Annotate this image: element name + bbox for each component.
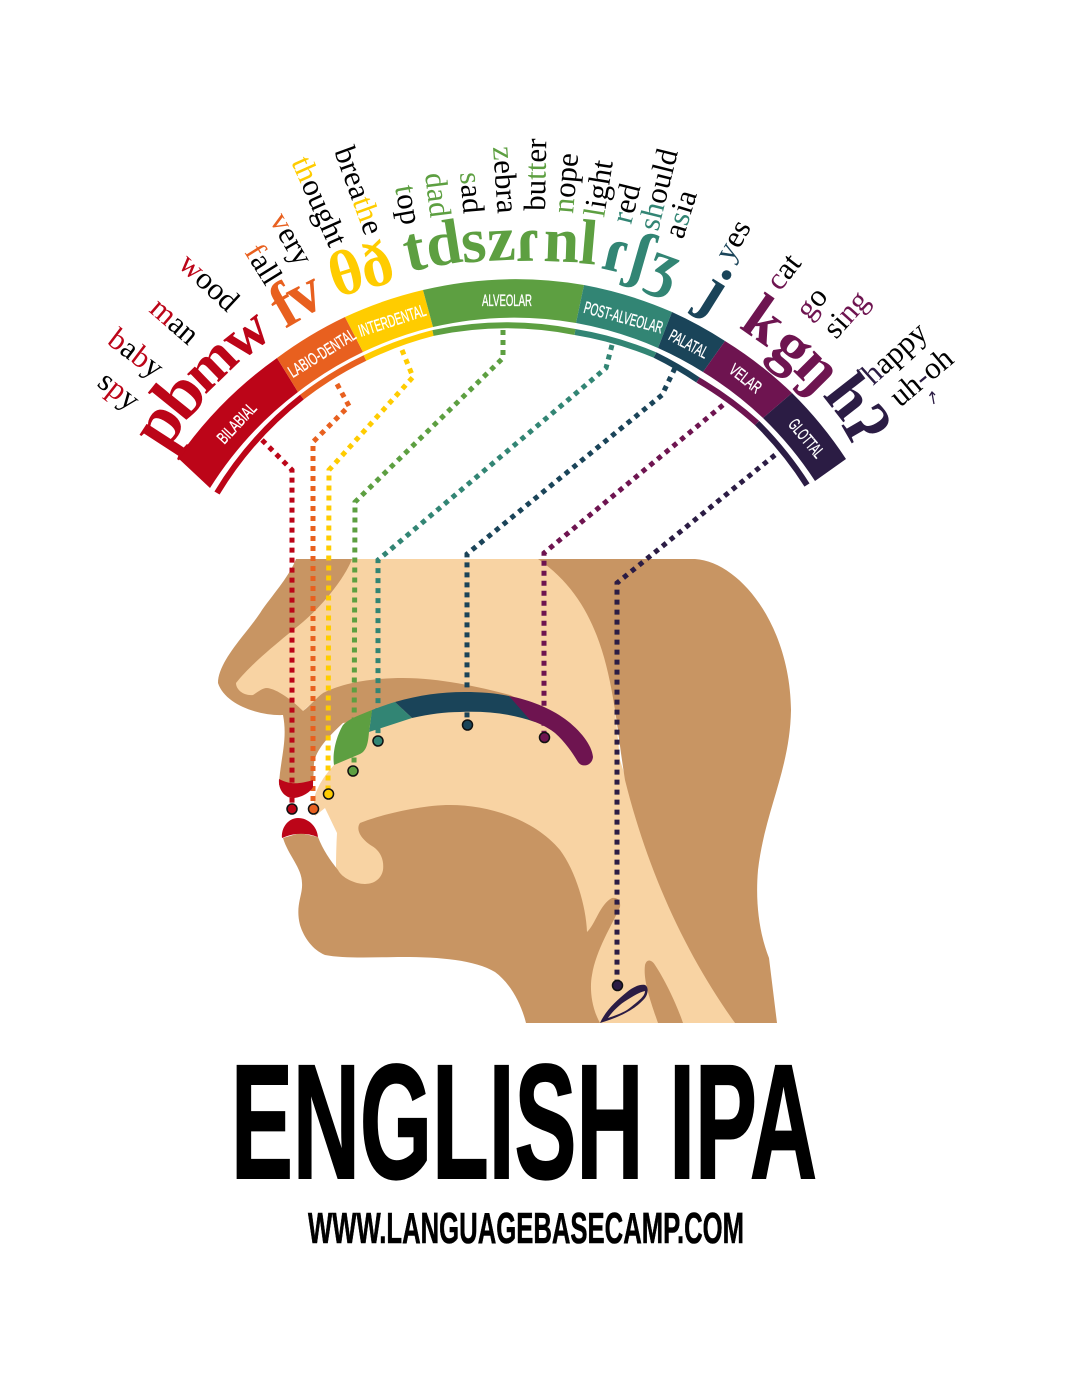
word: wood: wood [172, 246, 247, 318]
marker: velar [540, 732, 550, 742]
symbols: alveolar: z [485, 203, 517, 275]
band: velar [703, 341, 792, 418]
label: velar: VELAR [725, 360, 765, 397]
marker: glottal [612, 980, 622, 990]
symbols: bilabial [115, 293, 283, 462]
symbols: alveolar: s [457, 204, 489, 277]
symbols: palatal: j [687, 253, 743, 325]
word: nope: nope [545, 152, 585, 215]
symbols: labio-dental: v [273, 254, 334, 331]
symbols: glottal: h [811, 360, 889, 432]
dotted connector: glottal [617, 455, 775, 986]
icon: glottal stop arrow [930, 392, 935, 404]
symbols: labio-dental [256, 254, 334, 341]
symbols: post-alveolar [597, 212, 692, 302]
place of articulation arc [178, 279, 846, 493]
label: labio-dental: LABIO-DENTAL [285, 325, 359, 382]
thin strip: glottal [757, 423, 807, 485]
word: breathe: breathe [327, 141, 392, 239]
palate: post-alveolar zone [369, 702, 412, 732]
band: post-alveolar [576, 285, 672, 348]
symbols: alveolar: ɾ [515, 204, 542, 275]
back of head and neck [538, 559, 791, 1023]
thin strip: palatal [655, 355, 698, 380]
thin strip: velar [698, 380, 757, 423]
thin strip: interdental [365, 333, 433, 358]
band: alveolar [423, 279, 584, 327]
symbols: alveolar: l [577, 206, 601, 278]
word: cat: cat [758, 246, 808, 296]
word: fall: fall [238, 237, 290, 291]
palate: velum [509, 696, 593, 765]
symbols: alveolar: n [543, 204, 581, 276]
word: light: light [576, 157, 620, 219]
label: post-alveolar: POST-ALVEOLAR [582, 298, 665, 337]
vocal tract articulators [279, 692, 648, 1023]
example words [92, 138, 960, 417]
word: very: very [263, 206, 321, 272]
palate: palatal zone [395, 692, 535, 722]
word: butter: butter [517, 138, 553, 211]
head profile illustration [218, 559, 791, 1023]
word: asia: asia [656, 185, 704, 242]
epiglottis [645, 960, 683, 1023]
upper lip [279, 779, 313, 798]
label: bilabial: BILABIAL [213, 399, 261, 448]
dotted connector: velar [544, 405, 723, 737]
marker: alveolar [348, 766, 358, 776]
band: interdental [345, 290, 433, 352]
marker: labio-dental [308, 804, 318, 814]
symbols: velar: k [730, 280, 800, 359]
symbols: alveolar [396, 203, 601, 286]
thin strip: alveolar [433, 325, 575, 333]
word: yes: yes [707, 213, 758, 266]
IPA symbols [115, 203, 904, 462]
dotted connector: interdental [328, 350, 413, 794]
head interior cavity [232, 559, 735, 1023]
dotted connector: bilabial [262, 440, 292, 809]
word: man: man [143, 290, 207, 352]
lower lip [282, 818, 318, 838]
label: interdental: INTERDENTAL [356, 301, 429, 341]
symbols: post-alveolar: ʃ [618, 217, 664, 293]
glottis [600, 985, 648, 1023]
symbols: interdental [319, 226, 400, 311]
marker: bilabial [287, 804, 297, 814]
word: baby: baby [102, 321, 171, 385]
symbols: interdental: ð [352, 226, 400, 303]
symbols: alveolar: d [420, 205, 466, 281]
website url: WWW.LANGUAGEBASECAMP.COM [308, 1204, 744, 1253]
symbols: velar: ŋ [782, 330, 857, 405]
label: alveolar: ALVEOLAR [482, 291, 532, 310]
jaw and tongue [283, 805, 620, 1023]
symbols: labio-dental: f [256, 269, 311, 341]
dotted connector: post-alveolar [378, 345, 612, 741]
symbols: interdental: θ [319, 234, 372, 311]
word: top: top [388, 182, 429, 227]
marker: post-alveolar [373, 736, 383, 746]
dotted connector: alveolar [354, 330, 503, 771]
marker: interdental [324, 789, 334, 799]
symbols: alveolar: t [396, 212, 432, 286]
marker: palatal [462, 720, 472, 730]
symbols: post-alveolar: ʒ [640, 225, 692, 302]
palate: alveolar ridge [334, 710, 372, 765]
word: thought: thought [285, 151, 355, 252]
word: go: go [788, 279, 834, 325]
word: happy: happy [854, 314, 934, 391]
symbols: bilabial: m [168, 322, 250, 404]
dotted connector: palatal [467, 368, 675, 725]
word: zebra: zebra [486, 145, 526, 215]
symbols: glottal [811, 360, 904, 455]
word: sad: sad [453, 171, 492, 215]
symbols: post-alveolar: ɾ [597, 212, 638, 287]
band: palatal [658, 312, 725, 372]
word: spy: spy [92, 363, 148, 417]
label: palatal: PALATAL [666, 326, 712, 362]
thin strip: post-alveolar [575, 332, 655, 355]
nose and upper lip [218, 559, 530, 785]
word: uh-oh: uh-oh [882, 340, 960, 413]
thin strip: bilabial [217, 397, 302, 493]
symbols: glottal: ʔ [828, 394, 904, 455]
articulation point markers [287, 720, 622, 990]
word: should: should [631, 145, 685, 234]
band: glottal [763, 393, 846, 481]
label: glottal: GLOTTAL [784, 415, 828, 462]
band: bilabial [178, 358, 298, 488]
word: red: red [604, 179, 647, 227]
word: sing: sing [815, 283, 876, 345]
word: dad: dad [418, 171, 458, 220]
thin strip: labio-dental [302, 358, 365, 397]
symbols: bilabial: b [138, 355, 222, 434]
band: labio-dental [277, 317, 363, 392]
symbols: velar: g [759, 308, 829, 383]
symbols: bilabial: w [207, 293, 283, 372]
symbols: velar [730, 280, 857, 405]
dotted connector: labio-dental [313, 384, 349, 809]
symbols: bilabial: p [115, 387, 201, 462]
